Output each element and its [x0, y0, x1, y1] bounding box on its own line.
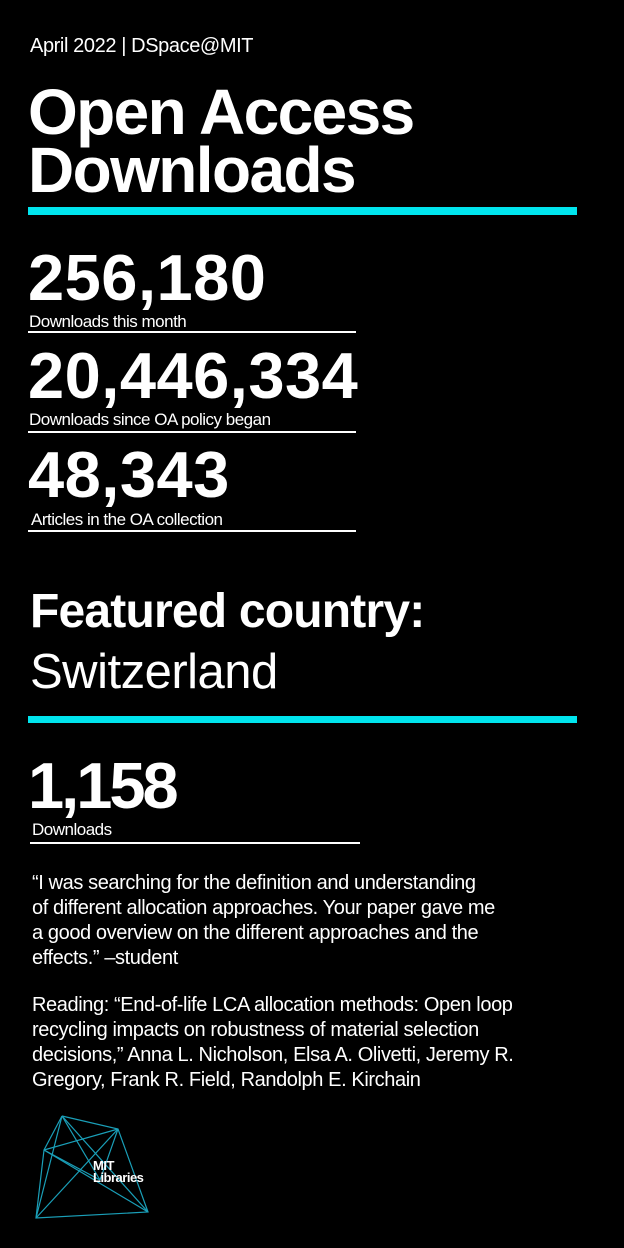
cyan divider middle: [28, 716, 577, 723]
quote: effects.” –student: [32, 947, 178, 969]
stat: downloads this month: Downloads this month: [29, 312, 186, 331]
logo: MIT Libraries: MIT: [93, 1158, 114, 1173]
title: Open Access: [28, 76, 414, 148]
reading citation: Gregory, Frank R. Field, Randolph E. Kirchain: [32, 1069, 420, 1091]
country name: Switzerland: [30, 645, 278, 699]
reading citation: recycling impacts on robustness of material selection: [32, 1019, 479, 1041]
reading citation: [32, 994, 513, 1091]
stat: downloads since OA policy: Downloads since OA policy began: [29, 410, 271, 429]
quote: [32, 872, 495, 969]
stat: country downloads: Downloads: [32, 820, 112, 839]
title: Downloads: [28, 134, 355, 206]
reading citation: Reading: “End-of-life LCA allocation methods: Open loop: [32, 994, 513, 1016]
cyan divider top: [28, 207, 577, 215]
quote: of different allocation approaches. Your paper gave me: [32, 897, 495, 919]
quote: a good overview on the different approaches and the: [32, 922, 478, 944]
stat: articles in collection: Articles in the OA collection: [31, 510, 222, 529]
logo: MIT Libraries: Libraries: [93, 1170, 144, 1185]
quote: “I was searching for the definition and understanding: [32, 872, 476, 894]
stat: country downloads: 1,158: [28, 749, 176, 822]
header: date and source: April 2022 | DSpace@MIT: [30, 35, 253, 57]
featured country heading: Featured country:: [30, 585, 424, 638]
stat: downloads since OA policy: 20,446,334: [28, 339, 358, 412]
stat: articles in collection: 48,343: [28, 438, 230, 511]
title: [28, 76, 414, 206]
stat: downloads this month: 256,180: [28, 241, 266, 314]
stat: country downloads: [28, 749, 360, 844]
stat: downloads this month: [28, 241, 356, 333]
reading citation: decisions,” Anna L. Nicholson, Elsa A. Olivetti, Jeremy R.: [32, 1044, 513, 1066]
stat: articles in collection: [28, 438, 356, 532]
logo: MIT Libraries: [35, 1115, 149, 1219]
